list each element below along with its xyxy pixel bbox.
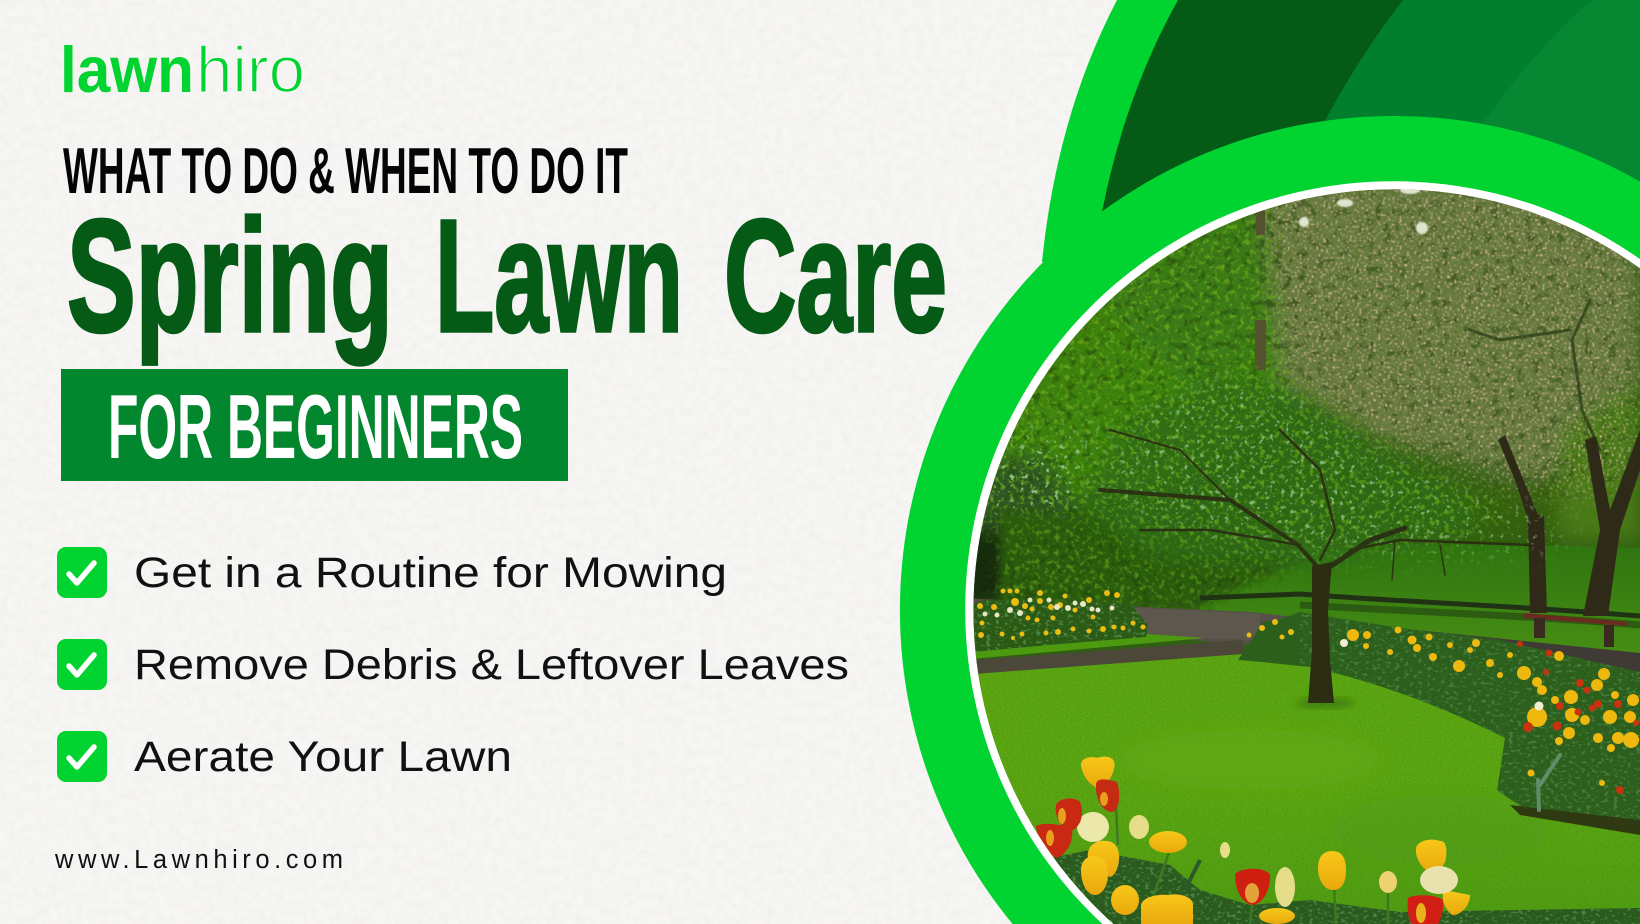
flower bed: left bbox=[960, 588, 1148, 652]
small bed left of trunk bbox=[1238, 618, 1300, 665]
item: remove debris and leftover leaves: Remove Debris & Leftover Leaves bbox=[134, 641, 849, 689]
right bed blooms bbox=[1319, 626, 1639, 786]
branches bbox=[1100, 430, 1530, 580]
decorative corner shapes bbox=[1042, 0, 1640, 500]
grass strip and brick walk bbox=[960, 634, 1243, 676]
white ring bbox=[965, 181, 1640, 924]
tulips: red bbox=[1036, 779, 1443, 924]
tulips: pale bbox=[1077, 812, 1458, 907]
pink blossom tree bbox=[1262, 180, 1640, 500]
checklist bbox=[57, 547, 849, 782]
leaves in clump bbox=[1538, 755, 1560, 810]
left bed tulips bbox=[977, 588, 1146, 640]
back tree trunks bbox=[1498, 430, 1640, 616]
white flowering shrub bbox=[975, 425, 1110, 530]
item: get in a routine for mowing: Get in a Routine for Mowing bbox=[134, 549, 727, 597]
back trees and lawn bbox=[1000, 430, 1640, 660]
bench bbox=[1524, 613, 1628, 647]
logo: lawnhiro: hiro bbox=[196, 33, 305, 106]
panel: header text and checklist bbox=[54, 33, 947, 874]
photo: spring garden with trees, lawn and tulips bbox=[960, 180, 1640, 924]
main lawn bbox=[960, 654, 1640, 924]
foliage canopy bbox=[1070, 365, 1580, 565]
heading: spring lawn care: Lawn bbox=[435, 186, 683, 365]
item: aerate your lawn: Aerate Your Lawn bbox=[134, 733, 512, 781]
hedge in front of back lawn edge bbox=[1000, 510, 1304, 606]
logo: lawnhiro bbox=[60, 33, 305, 106]
banner: for beginners: FOR BEGINNERS bbox=[108, 377, 523, 478]
forest background bbox=[960, 180, 1640, 924]
foreground tulip bed bbox=[1036, 757, 1640, 924]
website url: www.Lawnhiro.com bbox=[54, 846, 343, 874]
heading: what to do and when to do it: WHAT TO DO & WHEN TO DO IT bbox=[63, 134, 628, 207]
logo: lawnhiro: lawn bbox=[60, 33, 194, 106]
green ring bbox=[900, 116, 1640, 924]
bright forest foliage bbox=[981, 204, 1296, 535]
foliage bbox=[1040, 850, 1640, 924]
stems bbox=[1094, 808, 1388, 924]
flower bed: right bbox=[1243, 612, 1640, 835]
heading: spring lawn care bbox=[67, 186, 947, 365]
foreground tree bbox=[1070, 365, 1580, 580]
heading: spring lawn care: Care bbox=[724, 186, 947, 365]
dark branches in pink tree bbox=[1470, 300, 1600, 450]
fence rail bbox=[1200, 594, 1640, 616]
heading: spring lawn care: Spring bbox=[67, 186, 393, 365]
tree shadow bbox=[1295, 698, 1355, 708]
main tree trunk bbox=[1308, 562, 1334, 703]
gravel path bbox=[974, 598, 1640, 672]
sky gaps bbox=[1299, 186, 1428, 234]
banner: for beginners bbox=[61, 369, 568, 481]
bare trunks in the forest bbox=[1255, 200, 1266, 370]
tulips: yellow bbox=[1081, 757, 1470, 924]
